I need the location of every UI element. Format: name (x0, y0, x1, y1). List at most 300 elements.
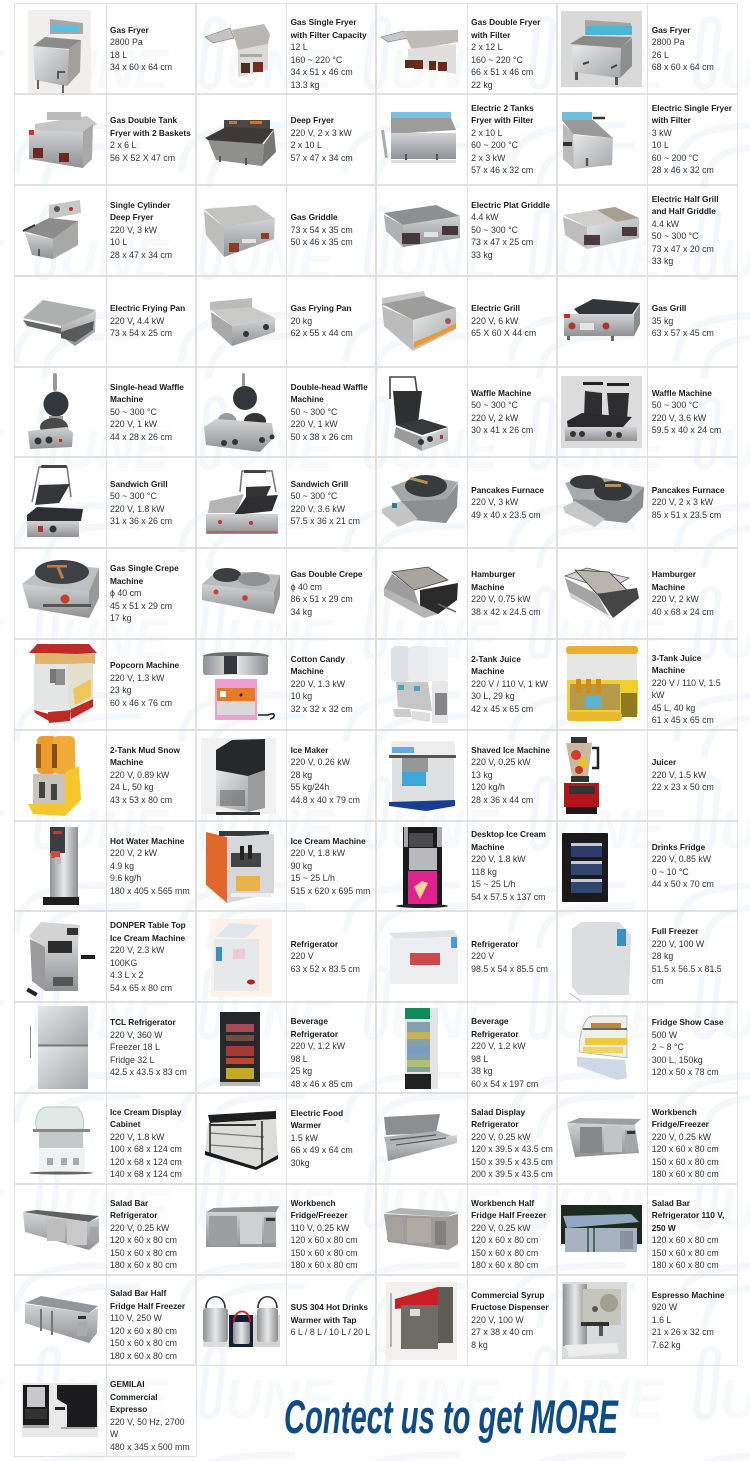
product: ice cream display cabinet: 220 V, 1.8 kW (110, 1132, 164, 1142)
product: sandwich grill single: 31 x 36 x 26 cm (110, 516, 172, 526)
product: electric plat griddle: 4.4 kW (471, 212, 499, 222)
product: ice cream display cabinet: 120 x 68 x 124 cm (110, 1157, 182, 1167)
product: electric food warmer: Electric Food (291, 1108, 343, 1118)
product: gas single fryer with filter: with Filter Capacity (291, 30, 367, 40)
product: cotton candy machine: Cotton Candy (291, 654, 345, 664)
product: waffle machine single: 50 ~ 300 °C (471, 400, 518, 410)
product: 3-tank juice machine: kW (652, 690, 664, 700)
product: waffle machine single: Waffle Machine (471, 388, 531, 398)
product: hamburger machine large: Hamburger (652, 569, 696, 579)
product: full freezer: 28 kg (652, 951, 673, 961)
product: gas single crepe machine: ϕ 40 cm (110, 588, 141, 598)
product: desktop ice cream machine: 54 x 57.5 x 137 cm (471, 892, 545, 902)
product: electric plat griddle: Electric Plat Griddle (471, 200, 550, 210)
product: waffle machine single: 220 V, 2 kW (471, 413, 518, 423)
product: espresso machine: 7.62 kg (652, 1340, 681, 1350)
product: hot water machine (14, 820, 197, 912)
product: double-head waffle machine: Machine (291, 394, 324, 404)
product: workbench fridge/freezer 220 V: Workbench (652, 1107, 697, 1117)
product: electric 2 tanks fryer: 2 x 3 kW (471, 153, 505, 163)
product: juicer: 220 V, 1.5 kW (652, 770, 706, 780)
product: 3-tank juice machine: 220 V / 110 V, 1.5 (652, 678, 721, 688)
product: single cylinder deep fryer: Deep Fryer (110, 212, 153, 222)
product: 2-tank juice machine (375, 638, 558, 731)
product: waffle machine double: 50 ~ 300 °C (652, 400, 699, 410)
product: tcl refrigerator: 220 V, 360 W (110, 1030, 162, 1040)
product: cotton candy machine: Machine (291, 666, 324, 676)
product: cotton candy machine: 32 x 32 x 32 cm (291, 704, 353, 714)
product: pancakes furnace double: 85 x 51 x 23.5 cm (652, 510, 721, 520)
product: hamburger machine small (375, 547, 558, 640)
product: gas grill: 63 x 57 x 45 cm (652, 328, 714, 338)
product: electric food warmer (196, 1093, 376, 1184)
product: beverage refrigerator 98 L: 25 kg (291, 1066, 312, 1076)
product: workbench half fridge half freezer (376, 1184, 557, 1275)
product: double-head waffle machine: 220 V, 1 kW (291, 419, 338, 429)
product: gas single fryer with filter: 12 L (291, 42, 308, 52)
product: 3-tank juice machine: 45 L, 40 kg (652, 703, 695, 713)
product: gas fryer 18 L: Gas Fryer (110, 25, 149, 35)
product: donper table top ice cream machine: 100KG (110, 958, 137, 968)
product: full freezer: cm (652, 976, 663, 986)
product: gas single fryer with filter: 34 x 51 x 46 cm (291, 67, 353, 77)
product: cotton candy machine: 10 kg (291, 691, 312, 701)
product: deep fryer (195, 93, 377, 186)
product: electric plat griddle: 33 kg (471, 250, 493, 260)
product: salad bar half fridge half freezer: Fridge Half Freezer (110, 1301, 185, 1311)
product: hot water machine: 4.9 kg (110, 861, 134, 871)
product: fridge show case: 500 W (652, 1030, 677, 1040)
product: espresso machine (557, 1275, 737, 1365)
product: electric half grill half griddle: 73 x 47 x 20 cm (652, 244, 714, 254)
product: sandwich grill single: 220 V, 1.8 kW (110, 504, 164, 514)
product: salad bar refrigerator: 220 V, 0.25 kW (110, 1223, 169, 1233)
product: shaved ice machine: 13 kg (471, 770, 493, 780)
product: deep fryer: 57 x 47 x 34 cm (291, 153, 353, 163)
product: workbench fridge/freezer 220 V: 120 x 60 x 80 cm (652, 1144, 719, 1154)
product: commercial syrup fructose dispenser: Fructose Dispenser (471, 1302, 549, 1312)
product: single-head waffle machine (14, 366, 197, 458)
product: salad bar half fridge half freezer (15, 1275, 196, 1365)
product: popcorn machine: 220 V, 1.3 kW (110, 673, 164, 683)
product: gas single fryer with filter: Gas Single Fryer (291, 17, 357, 27)
product: ice cream machine (195, 820, 377, 912)
product: ice cream machine: 15 ~ 25 L/h (291, 873, 335, 883)
product: cotton candy machine (195, 638, 377, 731)
product: gas single fryer with filter: 13.3 kg (291, 80, 319, 90)
product: electric food warmer: 30kg (291, 1158, 310, 1168)
product: 2-tank mud snow machine (14, 729, 197, 822)
product: gas double tank fryer (14, 93, 197, 186)
product: sus 304 hot drinks warmer (196, 1275, 376, 1365)
product: single-head waffle machine: Single-head Waffle (110, 382, 184, 392)
product: 2-tank juice machine: 30 L, 29 kg (471, 691, 515, 701)
product: chest refrigerator: Refrigerator (471, 939, 519, 949)
product: salad display refrigerator: 120 x 39.5 x 43.5 cm (471, 1144, 553, 1154)
product: electric grill: 220 V, 6 kW (471, 316, 518, 326)
product: workbench fridge/freezer 220 V: 180 x 60 x 80 cm (652, 1169, 719, 1179)
product: drinks fridge (556, 820, 738, 912)
product: gemilai commercial expresso: 480 x 345 x 500 mm (110, 1442, 190, 1452)
product: gas single crepe machine: Gas Single Crepe (110, 563, 179, 573)
product: gas fryer 18 L: 18 L (110, 50, 127, 60)
product: commercial syrup fructose dispenser: 27 x 38 x 40 cm (471, 1327, 533, 1337)
product: beverage refrigerator 98 L: 220 V, 1.2 kW (291, 1041, 345, 1051)
product: drinks fridge: 0 ~ 10 °C (652, 867, 689, 877)
product: electric frying pan: 73 x 54 x 25 cm (110, 328, 172, 338)
product: 2-tank juice machine: 2-Tank Juice (471, 654, 521, 664)
product: salad bar refrigerator 110 V: 120 x 60 x 80 cm (652, 1235, 719, 1245)
product: beverage refrigerator 98 L: 98 L (291, 1054, 308, 1064)
product: gas frying pan: 20 kg (291, 316, 312, 326)
product: drinks fridge: Drinks Fridge (652, 842, 705, 852)
product: donper table top ice cream machine (15, 911, 196, 1002)
product: fridge show case (557, 1002, 737, 1093)
product: donper table top ice cream machine: 54 x 65 x 80 cm (110, 983, 172, 993)
product: fridge show case: 2 ~ 8 °C (652, 1042, 684, 1052)
product: donper table top ice cream machine: Ice Cream Machine (110, 933, 185, 943)
product: electric 2 tanks fryer: 60 ~ 200 °C (471, 140, 518, 150)
product: desktop ice cream machine: 220 V, 1.8 kW (471, 854, 526, 864)
product: electric frying pan (14, 275, 197, 368)
product: tcl refrigerator: Freezer 18 L (110, 1042, 160, 1052)
product: salad bar refrigerator: 150 x 60 x 80 cm (110, 1248, 177, 1258)
product: gas double crepe machine: 86 x 51 x 29 cm (291, 594, 353, 604)
product: electric half grill half griddle: 50 ~ 300 °C (652, 231, 699, 241)
product: sandwich grill double (195, 456, 377, 549)
product: electric single fryer: 28 x 46 x 32 cm (652, 165, 714, 175)
product: deep fryer: 220 V, 2 x 3 kW (291, 128, 352, 138)
product: electric grill: 65 X 60 X 44 cm (471, 328, 536, 338)
product: fridge show case: 120 x 50 x 78 cm (652, 1067, 719, 1077)
product: beverage refrigerator 98 L: Refrigerator (291, 1029, 338, 1039)
product: gas double tank fryer: 2 x 6 L (110, 140, 136, 150)
product: salad bar refrigerator 110 V: 250 W (652, 1223, 676, 1233)
product: electric half grill half griddle (556, 184, 738, 277)
product: beverage refrigerator 98 L: Beverage (291, 1016, 328, 1026)
product: salad bar refrigerator 110 V (557, 1184, 737, 1275)
product: salad bar half fridge half freezer: 180 x 60 x 80 cm (110, 1351, 177, 1361)
product: gemilai commercial expresso: 220 V, 50 Hz, 2700 (110, 1417, 185, 1427)
product: gas griddle (195, 184, 377, 277)
product: workbench half fridge half freezer: Fridge Half Freezer (471, 1210, 546, 1220)
product: double-head waffle machine: Double-head Waffle (291, 382, 368, 392)
product: ice cream machine: 220 V, 1.8 kW (291, 848, 345, 858)
product: salad bar refrigerator: 180 x 60 x 80 cm (110, 1260, 177, 1270)
product: gas fryer 18 L: 34 x 60 x 64 cm (110, 62, 172, 72)
product: single cylinder deep fryer: 220 V, 3 kW (110, 225, 157, 235)
product: electric single fryer: with Filter (652, 115, 691, 125)
product: donper table top ice cream machine: DONPER Table Top (110, 920, 186, 930)
product: 2-tank mud snow machine: Machine (110, 757, 143, 767)
product: sus 304 hot drinks warmer: SUS 304 Hot Drinks (291, 1302, 368, 1312)
product: ice cream display cabinet: Ice Cream Display (110, 1107, 181, 1117)
product: workbench fridge/freezer 110 V (196, 1184, 376, 1275)
product: hamburger machine small: 220 V, 0.75 kW (471, 594, 530, 604)
product: gas fryer 18 L: 2800 Pa (110, 37, 143, 47)
product: ice maker: Ice Maker (291, 745, 328, 755)
product: espresso machine: 21 x 26 x 32 cm (652, 1327, 714, 1337)
product: 3-tank juice machine: Machine (652, 665, 685, 675)
product: waffle machine double: 59.5 x 40 x 24 cm (652, 425, 721, 435)
product: fridge show case: 300 L, 150kg (652, 1055, 703, 1065)
product: workbench fridge/freezer 220 V: 150 x 60 x 80 cm (652, 1157, 719, 1167)
product: ice maker: 55 kg/24h (291, 782, 329, 792)
product: electric half grill half griddle: 33 kg (652, 256, 673, 266)
product: electric single fryer: Electric Single Fryer (652, 103, 732, 113)
product: 2-tank juice machine: 42 x 45 x 65 cm (471, 704, 533, 714)
product: 2-tank juice machine: 220 V / 110 V, 1 kW (471, 679, 548, 689)
product: single cylinder deep fryer (14, 184, 197, 277)
product: electric single fryer: 10 L (652, 140, 669, 150)
product: salad bar refrigerator 110 V: 150 x 60 x 80 cm (652, 1248, 719, 1258)
product: tcl refrigerator: TCL Refrigerator (110, 1017, 176, 1027)
product: gas double fryer: 160 ~ 220 °C (471, 55, 523, 65)
product: donper table top ice cream machine: 220 V, 2.3 kW (110, 945, 164, 955)
product: 2-tank mud snow machine: 43 x 53 x 80 cm (110, 795, 172, 805)
product: single cylinder deep fryer: Single Cylinder (110, 200, 170, 210)
product: electric 2 tanks fryer: Fryer with Filter (471, 115, 533, 125)
product: electric food warmer: 1.5 kW (291, 1133, 318, 1143)
product: drinks fridge: 220 V, 0.85 kW (652, 854, 711, 864)
product: shaved ice machine: 120 kg/h (471, 782, 505, 792)
product: gas grill: 35 kg (652, 316, 673, 326)
product: gas fryer 18 L (14, 3, 197, 95)
product: sandwich grill double: 50 ~ 300 °C (291, 491, 337, 501)
product: gas double crepe machine (195, 547, 377, 640)
product: workbench fridge/freezer 110 V: Workbench (291, 1198, 336, 1208)
product: popcorn machine: 23 kg (110, 685, 132, 695)
product: 2-tank mud snow machine: 220 V, 0.89 kW (110, 770, 169, 780)
product: popcorn machine: Popcorn Machine (110, 660, 179, 670)
product: workbench fridge/freezer 110 V: 110 V, 0.25 kW (291, 1223, 349, 1233)
product: electric frying pan: 220 V, 4.4 kW (110, 316, 164, 326)
product: popcorn machine (14, 638, 197, 731)
product: electric 2 tanks fryer: 57 x 46 x 32 cm (471, 165, 533, 175)
product: workbench half fridge half freezer: 150 x 60 x 80 cm (471, 1248, 538, 1258)
product: gas grill: Gas Grill (652, 303, 686, 313)
product: full freezer: 220 V, 100 W (652, 939, 704, 949)
product: sandwich grill double: 57.5 x 36 x 21 cm (291, 516, 360, 526)
product: electric plat griddle: 50 ~ 300 °C (471, 225, 518, 235)
product: salad bar refrigerator 110 V: Refrigerator 110 V, (652, 1210, 724, 1220)
product: espresso machine: 1.6 L (652, 1315, 671, 1325)
product: ice maker: 44.8 x 40 x 79 cm (291, 795, 360, 805)
product: desktop ice cream machine: 118 kg (471, 867, 497, 877)
product: beverage refrigerator 98 L (196, 1002, 376, 1093)
product: salad bar refrigerator (15, 1184, 196, 1275)
product: ice cream display cabinet: Cabinet (110, 1119, 140, 1129)
product: electric plat griddle (375, 184, 558, 277)
product: ice cream machine: 515 x 620 x 695 mm (291, 886, 370, 896)
product: beverage refrigerator 197 cm: Beverage (471, 1016, 509, 1026)
product: waffle machine double: Waffle Machine (652, 388, 712, 398)
product: fridge show case: Fridge Show Case (652, 1017, 724, 1027)
product: gas single crepe machine: 45 x 51 x 29 cm (110, 601, 172, 611)
product: gas frying pan (195, 275, 377, 368)
product: gas fryer 26 L (556, 3, 738, 95)
product: gas griddle: 73 x 54 x 35 cm (291, 225, 353, 235)
product: electric half grill half griddle: Electric Half Grill (652, 194, 719, 204)
product: beverage refrigerator 197 cm: 220 V, 1.2 kW (471, 1041, 526, 1051)
product: workbench fridge/freezer 110 V: 150 x 60 x 80 cm (291, 1248, 358, 1258)
product: sus 304 hot drinks warmer: 6 L / 8 L / 10 L / 20 L (291, 1327, 370, 1337)
product: shaved ice machine (375, 729, 558, 822)
product: juicer: 22 x 23 x 50 cm (652, 782, 714, 792)
product: beverage refrigerator 197 cm: 98 L (471, 1054, 488, 1064)
product: pancakes furnace double: Pancakes Furnace (652, 485, 725, 495)
product: gas double crepe machine: 34 kg (291, 607, 312, 617)
product: electric half grill half griddle: and Half Griddle (652, 206, 716, 216)
product: single cylinder deep fryer: 28 x 47 x 34 cm (110, 250, 172, 260)
product: salad display refrigerator: 200 x 39.5 x 43.5 cm (471, 1169, 553, 1179)
product: salad bar half fridge half freezer: 150 x 60 x 80 cm (110, 1338, 177, 1348)
product: salad bar half fridge half freezer: Salad Bar Half (110, 1288, 166, 1298)
product: electric single fryer: 60 ~ 200 °C (652, 153, 699, 163)
product: gas double tank fryer: 56 X 52 X 47 cm (110, 153, 175, 163)
product: salad display refrigerator: 150 x 39.5 x 43.5 cm (471, 1157, 553, 1167)
product: donper table top ice cream machine: 4.3 L x 2 (110, 970, 143, 980)
product: full freezer: Full Freezer (652, 926, 698, 936)
product: cotton candy machine: 220 V, 1.3 kW (291, 679, 345, 689)
product: workbench fridge/freezer 110 V: Fridge/Freezer (291, 1210, 348, 1220)
product: 2-tank mud snow machine: 24 L, 50 kg (110, 782, 154, 792)
product: electric food warmer: Warmer (291, 1120, 321, 1130)
product: juicer: Juicer (652, 757, 676, 767)
product: single cylinder deep fryer: 10 L (110, 237, 127, 247)
product: salad bar half fridge half freezer: 110 V, 250 W (110, 1313, 162, 1323)
product: double-head waffle machine (195, 366, 377, 458)
product: gemilai commercial expresso (15, 1365, 196, 1456)
product: desktop ice cream machine (375, 820, 558, 912)
product: workbench half fridge half freezer: 180 x 60 x 80 cm (471, 1260, 538, 1270)
product: hamburger machine small: 38 x 42 x 24.5 cm (471, 607, 541, 617)
product: sandwich grill double: 220 V, 3.6 kW (291, 504, 345, 514)
product: workbench fridge/freezer 220 V: 220 V, 0.25 kW (652, 1132, 711, 1142)
product: gemilai commercial expresso: GEMILAI (110, 1379, 145, 1389)
product: hot water machine: 180 x 405 x 565 mm (110, 886, 190, 896)
product: desktop ice cream machine: Desktop Ice Cream (471, 829, 546, 839)
product: deep fryer: Deep Fryer (291, 115, 334, 125)
product: refrigerator 106 L: 220 V (291, 951, 314, 961)
product: salad bar half fridge half freezer: 120 x 60 x 80 cm (110, 1326, 177, 1336)
product: espresso machine: 920 W (652, 1302, 677, 1312)
product: 3-tank juice machine: 3-Tank Juice (652, 653, 701, 663)
product: hamburger machine large (556, 547, 738, 640)
product: sandwich grill single (14, 456, 197, 549)
product: chest refrigerator: 98.5 x 54 x 85.5 cm (471, 964, 548, 974)
product: juicer (556, 729, 738, 822)
product: chest refrigerator (376, 911, 557, 1002)
product: ice maker: 28 kg (291, 770, 312, 780)
product: commercial syrup fructose dispenser (376, 1275, 557, 1365)
product: tcl refrigerator: 42.5 x 43.5 x 83 cm (110, 1067, 187, 1077)
product: gas double crepe machine: ϕ 40 cm (291, 582, 322, 592)
product: ice cream display cabinet: 100 x 68 x 124 cm (110, 1144, 182, 1154)
product: gas double fryer (375, 3, 558, 95)
product: gas single crepe machine (14, 547, 197, 640)
product: pancakes furnace single: 220 V, 3 kW (471, 497, 518, 507)
product: gas fryer 26 L: 2800 Pa (652, 37, 685, 47)
product: salad display refrigerator (376, 1093, 557, 1184)
product: hamburger machine large: 220 V, 2 kW (652, 594, 699, 604)
product: gemilai commercial expresso: Expresso (110, 1404, 147, 1414)
product: popcorn machine: 60 x 46 x 76 cm (110, 698, 172, 708)
product: salad bar refrigerator: Salad Bar (110, 1198, 148, 1208)
product: beverage refrigerator 197 cm: 38 kg (471, 1066, 493, 1076)
product: drinks fridge: 44 x 50 x 70 cm (652, 879, 714, 889)
product: hamburger machine large: Machine (652, 582, 685, 592)
product: ice cream display cabinet: 140 x 68 x 124 cm (110, 1169, 182, 1179)
product: electric half grill half griddle: 4.4 kW (652, 219, 679, 229)
product: electric 2 tanks fryer (375, 93, 558, 186)
product: salad display refrigerator: 220 V, 0.25 kW (471, 1132, 530, 1142)
product: single-head waffle machine: 220 V, 1 kW (110, 419, 157, 429)
product: salad display refrigerator: Refrigerator (471, 1119, 519, 1129)
product: deep fryer: 2 x 10 L (291, 140, 322, 150)
product: espresso machine: Espresso Machine (652, 1290, 725, 1300)
product: 3-tank juice machine (556, 638, 738, 731)
product: ice maker (195, 729, 377, 822)
product: electric plat griddle: 73 x 47 x 25 cm (471, 237, 533, 247)
product: workbench fridge/freezer 110 V: 180 x 60 x 80 cm (291, 1260, 358, 1270)
product: hamburger machine small: Machine (471, 582, 504, 592)
product: gas double fryer: Gas Double Fryer (471, 17, 540, 27)
product: gas fryer 26 L: 26 L (652, 50, 669, 60)
product: pancakes furnace double (556, 456, 738, 549)
product: tcl refrigerator: Fridge 32 L (110, 1055, 154, 1065)
product: 2-tank mud snow machine: 2-Tank Mud Snow (110, 745, 180, 755)
product: pancakes furnace single: 49 x 40 x 23.5 cm (471, 510, 541, 520)
product: desktop ice cream machine: Machine (471, 842, 504, 852)
product: electric grill: Electric Grill (471, 303, 520, 313)
product: commercial syrup fructose dispenser: 8 kg (471, 1340, 488, 1350)
product: refrigerator 106 L: 63 x 52 x 83.5 cm (291, 964, 360, 974)
product: gas double crepe machine: Gas Double Crepe (291, 569, 363, 579)
product: sus 304 hot drinks warmer: Warmer with Tap (291, 1315, 356, 1325)
product: pancakes furnace single: Pancakes Furnace (471, 485, 544, 495)
product: double-head waffle machine: 50 x 38 x 26 cm (291, 432, 353, 442)
product: double-head waffle machine: 50 ~ 300 °C (291, 407, 337, 417)
product: gas fryer 26 L: 68 x 60 x 64 cm (652, 62, 714, 72)
product: workbench fridge/freezer 220 V (557, 1093, 737, 1184)
product: workbench half fridge half freezer: 220 V, 0.25 kW (471, 1223, 530, 1233)
product: beverage refrigerator 197 cm (376, 1002, 557, 1093)
product: shaved ice machine: 220 V, 0.25 kW (471, 757, 530, 767)
product: gas griddle: 50 x 46 x 35 cm (291, 237, 353, 247)
product: tcl refrigerator (15, 1002, 196, 1093)
product: hamburger machine small: Hamburger (471, 569, 515, 579)
product: ice maker: 220 V, 0.26 kW (291, 757, 350, 767)
product: single-head waffle machine: Machine (110, 394, 143, 404)
product: shaved ice machine: Shaved Ice Machine (471, 745, 550, 755)
product: full freezer: 51.5 x 56.5 x 81.5 (652, 964, 722, 974)
product: salad bar refrigerator 110 V: 180 x 60 x 80 cm (652, 1260, 719, 1270)
product: gas double fryer: 2 x 12 L (471, 42, 502, 52)
product: beverage refrigerator 197 cm: 60 x 54 x 197 cm (471, 1079, 538, 1089)
product: gemilai commercial expresso: Commercial (110, 1392, 158, 1402)
product: gas double fryer: 66 x 51 x 46 cm (471, 67, 533, 77)
product: beverage refrigerator 197 cm: Refrigerator (471, 1029, 519, 1039)
product: waffle machine single: 30 x 41 x 26 cm (471, 425, 533, 435)
product: chest refrigerator: 220 V (471, 951, 494, 961)
product: commercial syrup fructose dispenser: Commercial Syrup (471, 1290, 544, 1300)
product: gas griddle: Gas Griddle (291, 212, 338, 222)
product: waffle machine double: 220 V, 3.6 kW (652, 413, 706, 423)
product: sandwich grill single: Sandwich Grill (110, 479, 168, 489)
product: electric grill (375, 275, 558, 368)
product: electric food warmer: 66 x 49 x 64 cm (291, 1145, 353, 1155)
